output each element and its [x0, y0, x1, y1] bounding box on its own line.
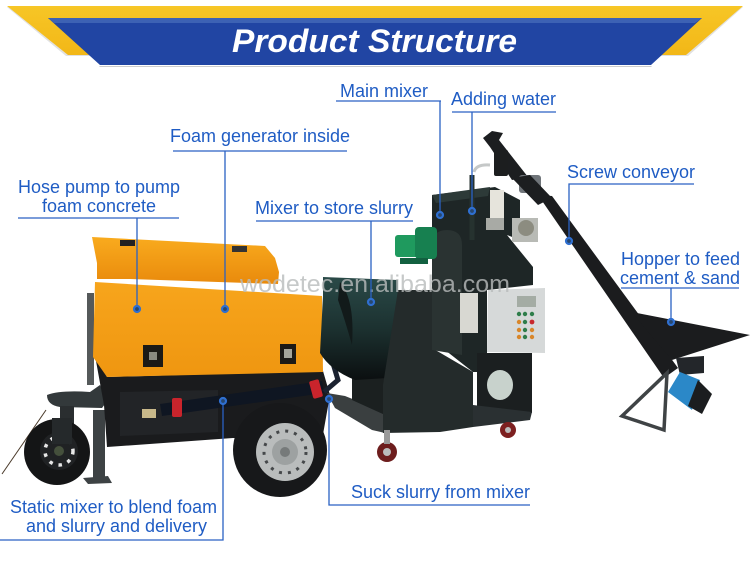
- green motor: [395, 227, 437, 264]
- label: Hopper: Hopper to feed: [621, 249, 740, 269]
- label: Adding water: [451, 89, 556, 214]
- label: Screw conveyor: Screw conveyor: [567, 162, 695, 182]
- label: Adding water: Adding water: [451, 89, 556, 109]
- machine: slurry mixer: [320, 165, 545, 462]
- label: Mixer to store slurry: [255, 198, 413, 305]
- storage tank: [320, 277, 398, 380]
- label: Suck slurry from mixer: [326, 396, 530, 505]
- label: Static mixer: and slurry and delivery: [26, 516, 207, 536]
- drawbar and jack: [2, 385, 112, 484]
- label: Foam generator inside: [170, 126, 350, 312]
- label: Main mixer: [336, 81, 443, 218]
- rear wheel: [233, 403, 327, 497]
- support plate: [383, 290, 473, 433]
- watermark: wodetec.en.alibaba.com: [239, 271, 510, 298]
- title banner: [7, 6, 743, 67]
- hopper legs: [622, 373, 667, 430]
- machine: screw conveyor: [483, 131, 678, 378]
- control cabinet: [460, 288, 545, 353]
- label: Mixer to store slurry: Mixer to store slurry: [255, 198, 413, 218]
- label: Hopper: [620, 249, 740, 325]
- front wheel: [24, 418, 90, 485]
- machine: foam concrete pump trailer: [2, 237, 338, 497]
- gearbox and pipe: [472, 165, 538, 242]
- label: Main mixer: Main mixer: [340, 81, 428, 101]
- label: Hose pump: Hose pump to pump: [18, 177, 180, 197]
- black base: [94, 350, 330, 447]
- machine: feed hopper: [622, 312, 750, 430]
- label: Suck slurry from mixer: Suck slurry from mixer: [351, 482, 530, 502]
- upper mixer: [432, 187, 533, 372]
- frame rails: [327, 393, 385, 433]
- casters: [377, 422, 516, 462]
- orange lid: [92, 237, 279, 284]
- label: Static mixer: Static mixer to blend foam: [10, 497, 217, 517]
- label: Hopper: cement & sand: [620, 268, 740, 288]
- title text: Product Structure: [232, 23, 517, 59]
- label: Hose pump: foam concrete: [42, 196, 156, 216]
- label: Foam generator inside: Foam generator inside: [170, 126, 350, 146]
- label: Hose pump: [18, 177, 180, 312]
- delivery hose: [142, 360, 338, 418]
- label: Static mixer: [0, 398, 226, 540]
- label: Screw conveyor: [566, 162, 695, 244]
- lower frame: [473, 353, 532, 427]
- stand: [432, 230, 462, 355]
- orange box: [93, 282, 323, 377]
- hopper blue motor: [668, 356, 712, 414]
